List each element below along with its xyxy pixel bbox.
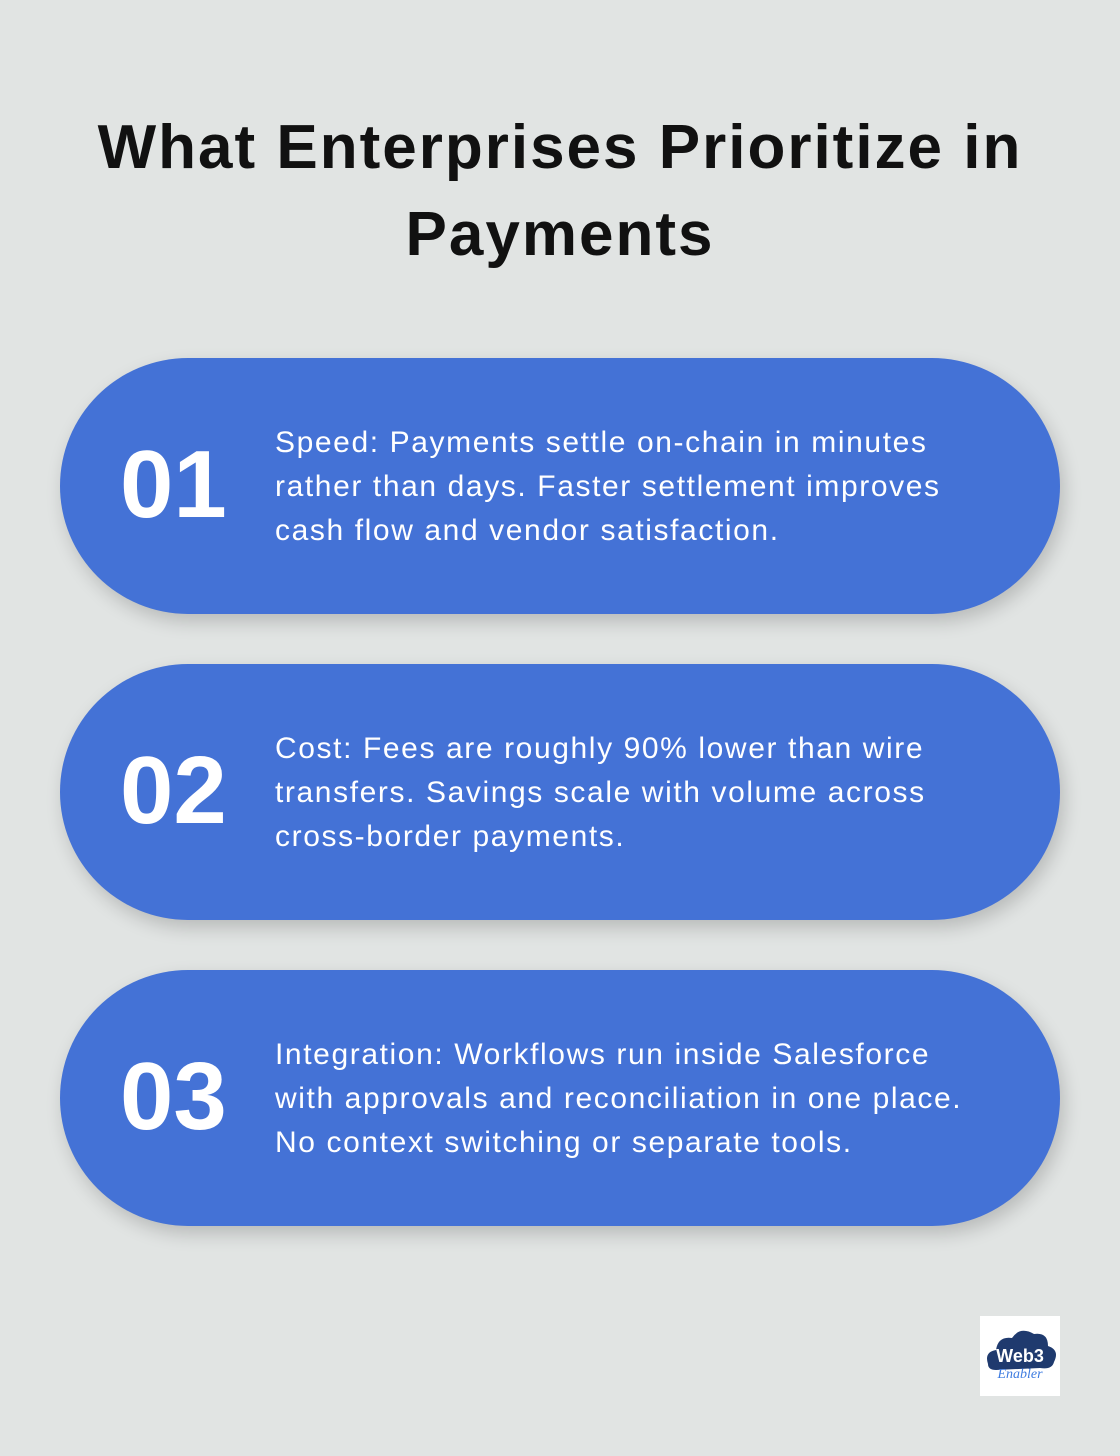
text: cost: Cost: Fees are roughly 90% lower than wire: [275, 732, 924, 765]
number 01: 01: [120, 431, 227, 538]
text: integration: No context switching or separate tools.: [275, 1126, 853, 1159]
text: cost: cross-border payments.: [275, 820, 625, 853]
card 03: integration: [60, 970, 1060, 1226]
logo: Web3 Enabler: [980, 1316, 1060, 1396]
text: integration: Integration: Workflows run inside Salesforce: [275, 1038, 930, 1071]
text: speed: rather than days. Faster settlement improves: [275, 470, 941, 503]
text: speed: [275, 426, 941, 547]
title: Payments: [406, 200, 714, 269]
text: integration: [275, 1038, 962, 1159]
logo: Web3 Enabler: Web3: [996, 1346, 1044, 1366]
logo: Web3 Enabler: Enabler: [996, 1367, 1043, 1382]
title: What Enterprises Prioritize in: [98, 113, 1022, 182]
text: cost: transfers. Savings scale with volume across: [275, 776, 926, 809]
text: speed: cash flow and vendor satisfaction.: [275, 514, 780, 547]
number 02: 02: [120, 737, 227, 844]
card 02: cost: [60, 664, 1060, 920]
title: [98, 113, 1022, 269]
card 01: speed: [60, 358, 1060, 614]
text: cost: [275, 732, 926, 853]
text: integration: with approvals and reconciliation in one place.: [275, 1082, 962, 1115]
text: speed: Speed: Payments settle on-chain in minutes: [275, 426, 928, 459]
number 03: 03: [120, 1043, 227, 1150]
